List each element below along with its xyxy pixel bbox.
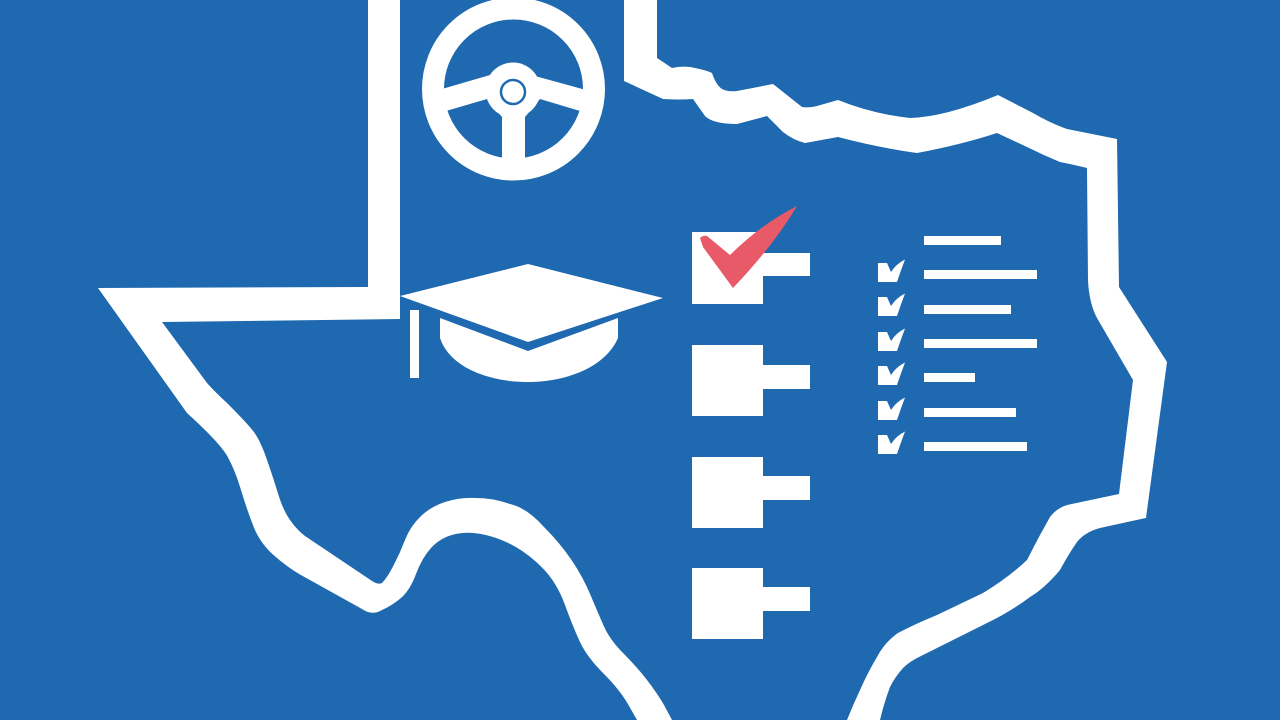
item box 3 — [692, 457, 810, 528]
icon: steering wheel — [433, 8, 594, 170]
small checklist — [878, 236, 1037, 454]
list row 7 — [878, 432, 1027, 454]
list row 5 — [878, 362, 975, 385]
icon: graduation cap — [400, 264, 663, 382]
item box 4 — [692, 568, 810, 639]
list row 3 — [878, 294, 1011, 316]
outline: west and south border — [98, 0, 672, 720]
list line 1 — [924, 236, 1001, 245]
list row 4 — [878, 328, 1037, 351]
icon: red check mark — [700, 206, 797, 288]
checklist: large boxes — [692, 232, 810, 639]
list row 2 — [878, 260, 1037, 282]
list row 6 — [878, 398, 1016, 420]
outline: north and east border — [624, 0, 1167, 720]
checked item box — [692, 232, 810, 304]
item box 2 — [692, 345, 810, 416]
